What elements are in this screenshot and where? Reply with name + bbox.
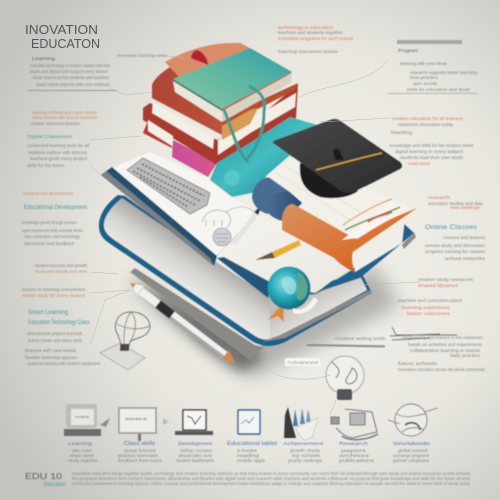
sketch: elephant doodle and medal	[202, 207, 254, 246]
text block: left note 4	[22, 191, 87, 246]
caption 6: publications	[339, 458, 375, 463]
teal ribbon	[224, 86, 264, 162]
text block: left note 3	[27, 134, 89, 168]
text block: left note 3: skills for the future	[27, 163, 64, 168]
bottom book	[123, 251, 264, 360]
text block: teal note: research	[428, 195, 451, 200]
icon: lightbulb with keyboard	[100, 312, 150, 370]
footer text: innovation education brings together books, technology and creative teaching methods so that every learner in every community can reach their full potential through open study and shared resources across schools	[72, 471, 471, 476]
text block: red note	[390, 116, 473, 166]
text block: left note 6: ideas become projects and tools	[27, 331, 83, 336]
text block: boxed heading: research supports better teaching	[410, 70, 477, 75]
text block: red note: students lead their own study	[400, 155, 464, 160]
caption 1: study together	[68, 458, 98, 463]
text block: left note 2: teaching methods and course design	[32, 110, 97, 115]
caption 7	[393, 441, 431, 463]
text block: left note 6: practical training with modern equipment	[28, 361, 101, 366]
caption 5: top schools	[292, 453, 321, 458]
title	[25, 22, 100, 51]
text block: left note 3: Digital Classroom	[27, 134, 72, 139]
text block: teal note: progress tracking for classes	[425, 249, 486, 254]
label box	[285, 358, 320, 366]
title: INOVATION	[25, 22, 98, 37]
icon: buildings	[284, 407, 318, 440]
icon: tablet	[238, 410, 260, 434]
text block: boxed heading: open access	[413, 81, 438, 86]
sketch: paper plane	[390, 327, 457, 340]
text block: teal note: education studies and data	[428, 201, 483, 206]
caption 4: e-books	[237, 448, 258, 453]
text block: left note 1: education technology in modern classes and labs	[30, 63, 111, 68]
caption 1	[68, 441, 98, 463]
caption 4: Educational tablet	[227, 441, 278, 447]
footer text: continued investment in learning spaces, online courses and professional development helps institutions adapt to change and supports lifelong education for people around the world in every field of study today	[72, 481, 471, 486]
caption 2: feedback from tutors	[118, 458, 163, 463]
text block: left note 4: new curriculum and technology	[24, 234, 81, 239]
footer logo: EDU 10	[25, 472, 63, 481]
caption 3: online courses	[180, 448, 213, 453]
left page	[113, 152, 258, 257]
globe	[268, 266, 318, 322]
text block: left note 3: connected learning tools for all	[27, 143, 89, 148]
icon row	[64, 404, 438, 441]
caption 5	[283, 441, 324, 463]
text block: left note 5: student success and growth	[35, 263, 87, 268]
caption 7: exchange programs	[393, 453, 430, 458]
text block: left note 3: students explore with devices	[28, 150, 88, 155]
blue rolled spines	[252, 177, 302, 221]
caption 4	[227, 441, 278, 463]
text block: lower right notes: better outcomes	[407, 311, 451, 316]
caption 7: Worldwide	[393, 441, 431, 446]
text block: left note 6: flexible learning spaces	[25, 355, 78, 360]
text block: teal note: courses and lessons	[443, 235, 486, 240]
text block: left note 5: access to learning everywhere	[22, 287, 85, 292]
caption 2: practice exercises	[118, 453, 159, 458]
text block: teal note: Online Classes	[425, 225, 477, 231]
text block: red note: knowledge and skills for the modern world	[390, 143, 473, 148]
fountain pen on page	[231, 205, 262, 245]
caption 1: share ideas	[70, 453, 95, 458]
text block: top note	[278, 25, 353, 54]
text block: left note 6: teams create and share work	[28, 338, 83, 343]
text block: lower right notes: hands on activities and experiments	[408, 342, 483, 347]
caption 5: Achievement	[283, 441, 324, 446]
footer text	[72, 471, 471, 486]
text block: red note: classroom innovation today	[398, 122, 454, 127]
icon: sketched book	[331, 409, 378, 440]
text block: teal note: school networks	[445, 256, 486, 261]
pink book	[172, 140, 217, 177]
text block: left note 6: Smart Learning	[28, 310, 68, 316]
caption 3: Development	[178, 441, 213, 446]
text block: left note 6: lessons with new media	[25, 348, 76, 353]
text block: left note 1: innovation learning notes	[117, 53, 168, 58]
text block: lower right notes: engineering and science in the classroom	[403, 335, 483, 340]
caption 5: growth charts	[290, 448, 321, 453]
caption 3: virtual labs now	[178, 453, 213, 458]
text block: top note: teachers and students together	[278, 30, 343, 35]
text block: left note 4: Educational Development	[24, 204, 87, 211]
caption 7: partner campuses	[393, 458, 430, 463]
text block: lower right notes: future schools	[398, 361, 438, 366]
right page	[217, 215, 352, 293]
shadow under books	[125, 265, 400, 378]
large book page block	[99, 195, 372, 346]
open book cover strips	[101, 167, 416, 298]
caption 6: Research	[339, 441, 369, 446]
text block: left note 1: books and digital tools support every learner	[30, 69, 108, 74]
pen	[130, 283, 235, 363]
teal binding	[210, 117, 317, 197]
caption 1: Learning	[68, 441, 93, 446]
text block: left note 1	[28, 53, 168, 91]
pencil	[255, 240, 301, 260]
text block: pen caption with rod	[307, 336, 386, 347]
footer logo: Education	[44, 482, 66, 488]
text block: teal note: new findings	[450, 205, 481, 210]
footer text: the programs described here connect classrooms, laboratories and libraries with digital tools and research while teachers and students collaborate on projects that grow knowledge and skills for the future of work	[72, 476, 471, 481]
leader lines	[90, 56, 420, 415]
text block: lower right notes: daily practice	[450, 353, 480, 358]
text block: boxed heading: Program	[398, 48, 418, 53]
text block: left note 3: teachers guide every project	[30, 156, 88, 161]
text block: left note 4: open resources help schools share	[22, 228, 83, 233]
graduation cap	[273, 119, 402, 198]
keyboard	[127, 158, 210, 214]
text block: top note: innovative programs for each school	[278, 36, 353, 41]
text block: red note: Teaching	[390, 130, 413, 135]
illustration: stacked books	[99, 43, 417, 363]
caption 4: mobile apps	[237, 458, 266, 463]
text block: boxed heading	[388, 40, 477, 94]
text block: lower right notes: teachers and curriculum plans	[398, 298, 463, 303]
text block: red note: read more	[408, 161, 430, 166]
text block: lower right notes: innovation education across the whole community	[398, 367, 486, 372]
caption 2: Class skills	[124, 441, 155, 447]
caption 3: student dashboards	[176, 458, 215, 463]
orange book	[282, 204, 417, 272]
text block: left note 4: knowledge grows through practice	[22, 220, 77, 225]
text block: left note 6	[25, 310, 101, 366]
icon: laptop	[175, 410, 213, 435]
label box: Advanced	[287, 360, 319, 365]
footer logo	[25, 472, 66, 488]
top green book	[173, 48, 292, 122]
text block: left note 2: online lessons with shared resources	[32, 115, 98, 120]
right callouts	[278, 25, 486, 372]
text block: pen caption with rod: creative writing tools	[335, 336, 386, 341]
caption 1: take notes	[72, 448, 93, 453]
text block: lower right notes: shared libraries	[418, 283, 459, 288]
text block: left note 5: mobile study for every student	[22, 293, 86, 298]
icon: framed screen: slides	[125, 417, 148, 421]
white notebook under cap	[267, 158, 410, 239]
text block: teal note: remote study and discussion	[425, 243, 485, 248]
text block: lower right notes: modern study resources	[418, 277, 474, 282]
title: EDUCATON	[31, 36, 100, 51]
text block: left note 1: ideas shared across students and teachers	[33, 75, 110, 80]
cap button	[333, 149, 344, 160]
icon: sketched globe	[388, 404, 438, 436]
text block: left note 4: discussion and feedback	[24, 241, 75, 246]
caption 7: global network	[398, 448, 429, 453]
text block: lower right notes: learning experience	[402, 305, 451, 310]
left callouts	[22, 53, 168, 366]
caption 4: reading	[237, 453, 260, 458]
text block: red note: digital learning in every subject	[395, 149, 464, 154]
text block: left note 6: Education Technology Class	[28, 320, 90, 326]
caption 3	[176, 441, 215, 463]
tassel	[316, 153, 382, 170]
text block: red note: creative education for all learners	[392, 116, 464, 121]
icon captions	[68, 441, 431, 463]
text block: left note 2	[30, 110, 98, 126]
text block: top note: technology in education	[278, 25, 333, 30]
text block: boxed heading: best practice	[410, 75, 438, 80]
icon: sketched lightbulb globe	[326, 356, 364, 400]
caption 6: papers	[341, 448, 367, 453]
caption 2	[118, 441, 163, 463]
text block: left note 5	[22, 263, 87, 298]
caption 6	[339, 441, 375, 463]
text block: left note 2: creative classroom practice	[30, 121, 80, 126]
icon: red bookmark	[191, 50, 208, 65]
bookmark tabs	[342, 199, 410, 240]
caption 6: archives	[339, 453, 370, 458]
text block: lower right notes: collaborative learning in teams	[410, 348, 481, 353]
text block: left note 1: Learning	[32, 56, 56, 61]
text block: top note: learning outcomes review	[278, 49, 339, 54]
red book stack	[143, 43, 298, 165]
text block: boxed heading: learning with new ideas	[400, 61, 448, 66]
text block: lower right notes	[398, 277, 486, 372]
text block: left note 5: measured results over time	[35, 269, 87, 274]
text block: left note 1: study habits improve with new methods	[36, 82, 111, 87]
icon: laptop sketch	[64, 404, 110, 436]
text block: left note 4: research and development	[23, 191, 74, 196]
text block: boxed heading: tools for education and study	[407, 87, 471, 92]
icon: laptop sketch: notes	[75, 415, 89, 419]
icon: framed screen	[119, 408, 169, 441]
text block: teal note	[425, 195, 486, 261]
caption 5: yearly rankings	[288, 458, 323, 463]
caption 2: group lessons	[124, 448, 157, 453]
